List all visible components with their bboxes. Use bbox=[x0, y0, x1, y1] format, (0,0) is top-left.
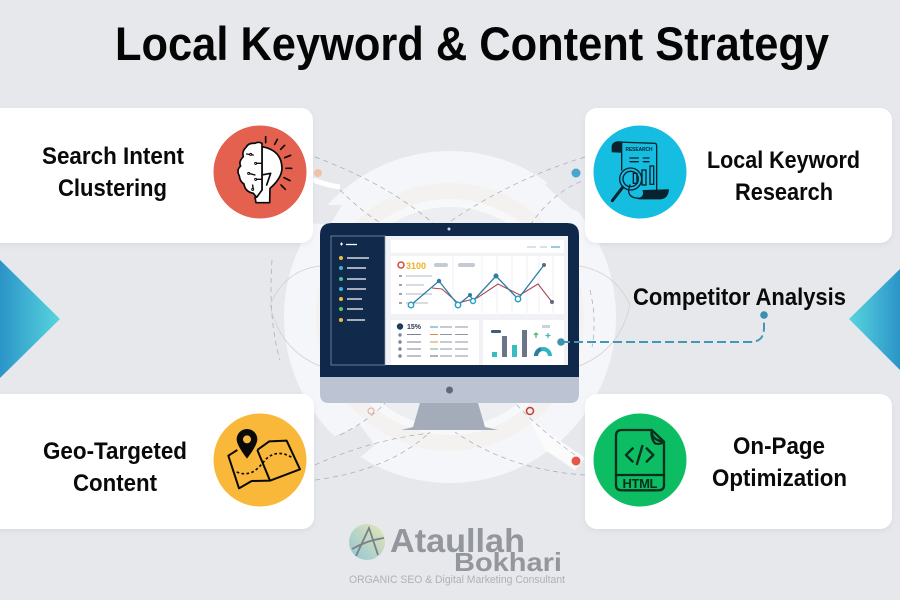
label: local keyword research bbox=[707, 147, 860, 206]
label: local keyword research: Research bbox=[735, 179, 833, 206]
line chart panel bbox=[391, 256, 564, 314]
arrow: right edge bbox=[849, 269, 900, 370]
title: Local Keyword & Content Strategy bbox=[115, 17, 829, 70]
decorative dot: blue bbox=[572, 168, 580, 178]
icon text: research: RESEARCH bbox=[626, 147, 652, 153]
sidebar bbox=[331, 236, 385, 365]
connector: dashboard to competitor analysis bbox=[557, 311, 768, 346]
label: geo-targeted content bbox=[43, 438, 187, 497]
icon text: html: HTML bbox=[622, 476, 658, 491]
label: geo-targeted content: Content bbox=[73, 470, 157, 497]
monitor screen bbox=[385, 236, 568, 365]
label: on-page optimization bbox=[712, 433, 847, 492]
bar chart panel bbox=[483, 320, 564, 365]
logo text: bokhari: Bokhari bbox=[454, 547, 562, 577]
panel: local keyword research bbox=[585, 108, 892, 243]
monitor body bbox=[320, 223, 579, 377]
icon: map with location pin bbox=[214, 414, 306, 506]
label: on-page optimization: On-Page bbox=[733, 433, 825, 460]
logo mark bbox=[349, 524, 385, 560]
table panel: 15% bbox=[407, 324, 422, 331]
logo text: ataullah: Ataullah bbox=[390, 522, 525, 559]
monitor stand bbox=[401, 403, 498, 430]
label: search intent clustering: Clustering bbox=[58, 175, 167, 202]
watermark logo bbox=[349, 522, 565, 586]
decorative dot: red bbox=[572, 456, 580, 466]
background: radial rings behind monitor bbox=[270, 151, 630, 483]
arrow: left edge bbox=[0, 260, 60, 378]
line chart panel: 3100 bbox=[406, 261, 426, 271]
panel: geo-targeted content bbox=[0, 394, 314, 529]
monitor bbox=[320, 223, 579, 430]
panel: on-page optimization bbox=[585, 394, 892, 529]
decorative dot: peach bbox=[314, 169, 322, 177]
label: on-page optimization: Optimization bbox=[712, 465, 847, 492]
table panel bbox=[391, 320, 479, 365]
icon: html file bbox=[594, 414, 686, 506]
label: search intent clustering: Search Intent bbox=[42, 143, 184, 170]
dashboard header bar bbox=[391, 240, 564, 253]
decorative icon: pale ring bbox=[368, 408, 374, 414]
panel: search intent clustering bbox=[0, 108, 313, 243]
icon: brain and light bulb bbox=[214, 126, 306, 218]
label: competitor analysis: Competitor Analysis bbox=[633, 284, 846, 311]
label: geo-targeted content: Geo-Targeted bbox=[43, 438, 187, 465]
icon: research document and magnifier bbox=[594, 126, 686, 218]
label: search intent clustering bbox=[42, 143, 184, 202]
decorative icon: red ring bbox=[526, 408, 534, 414]
logo tagline: ORGANIC SEO & Digital Marketing Consultant bbox=[349, 574, 565, 586]
label: local keyword research: Local Keyword bbox=[707, 147, 860, 174]
